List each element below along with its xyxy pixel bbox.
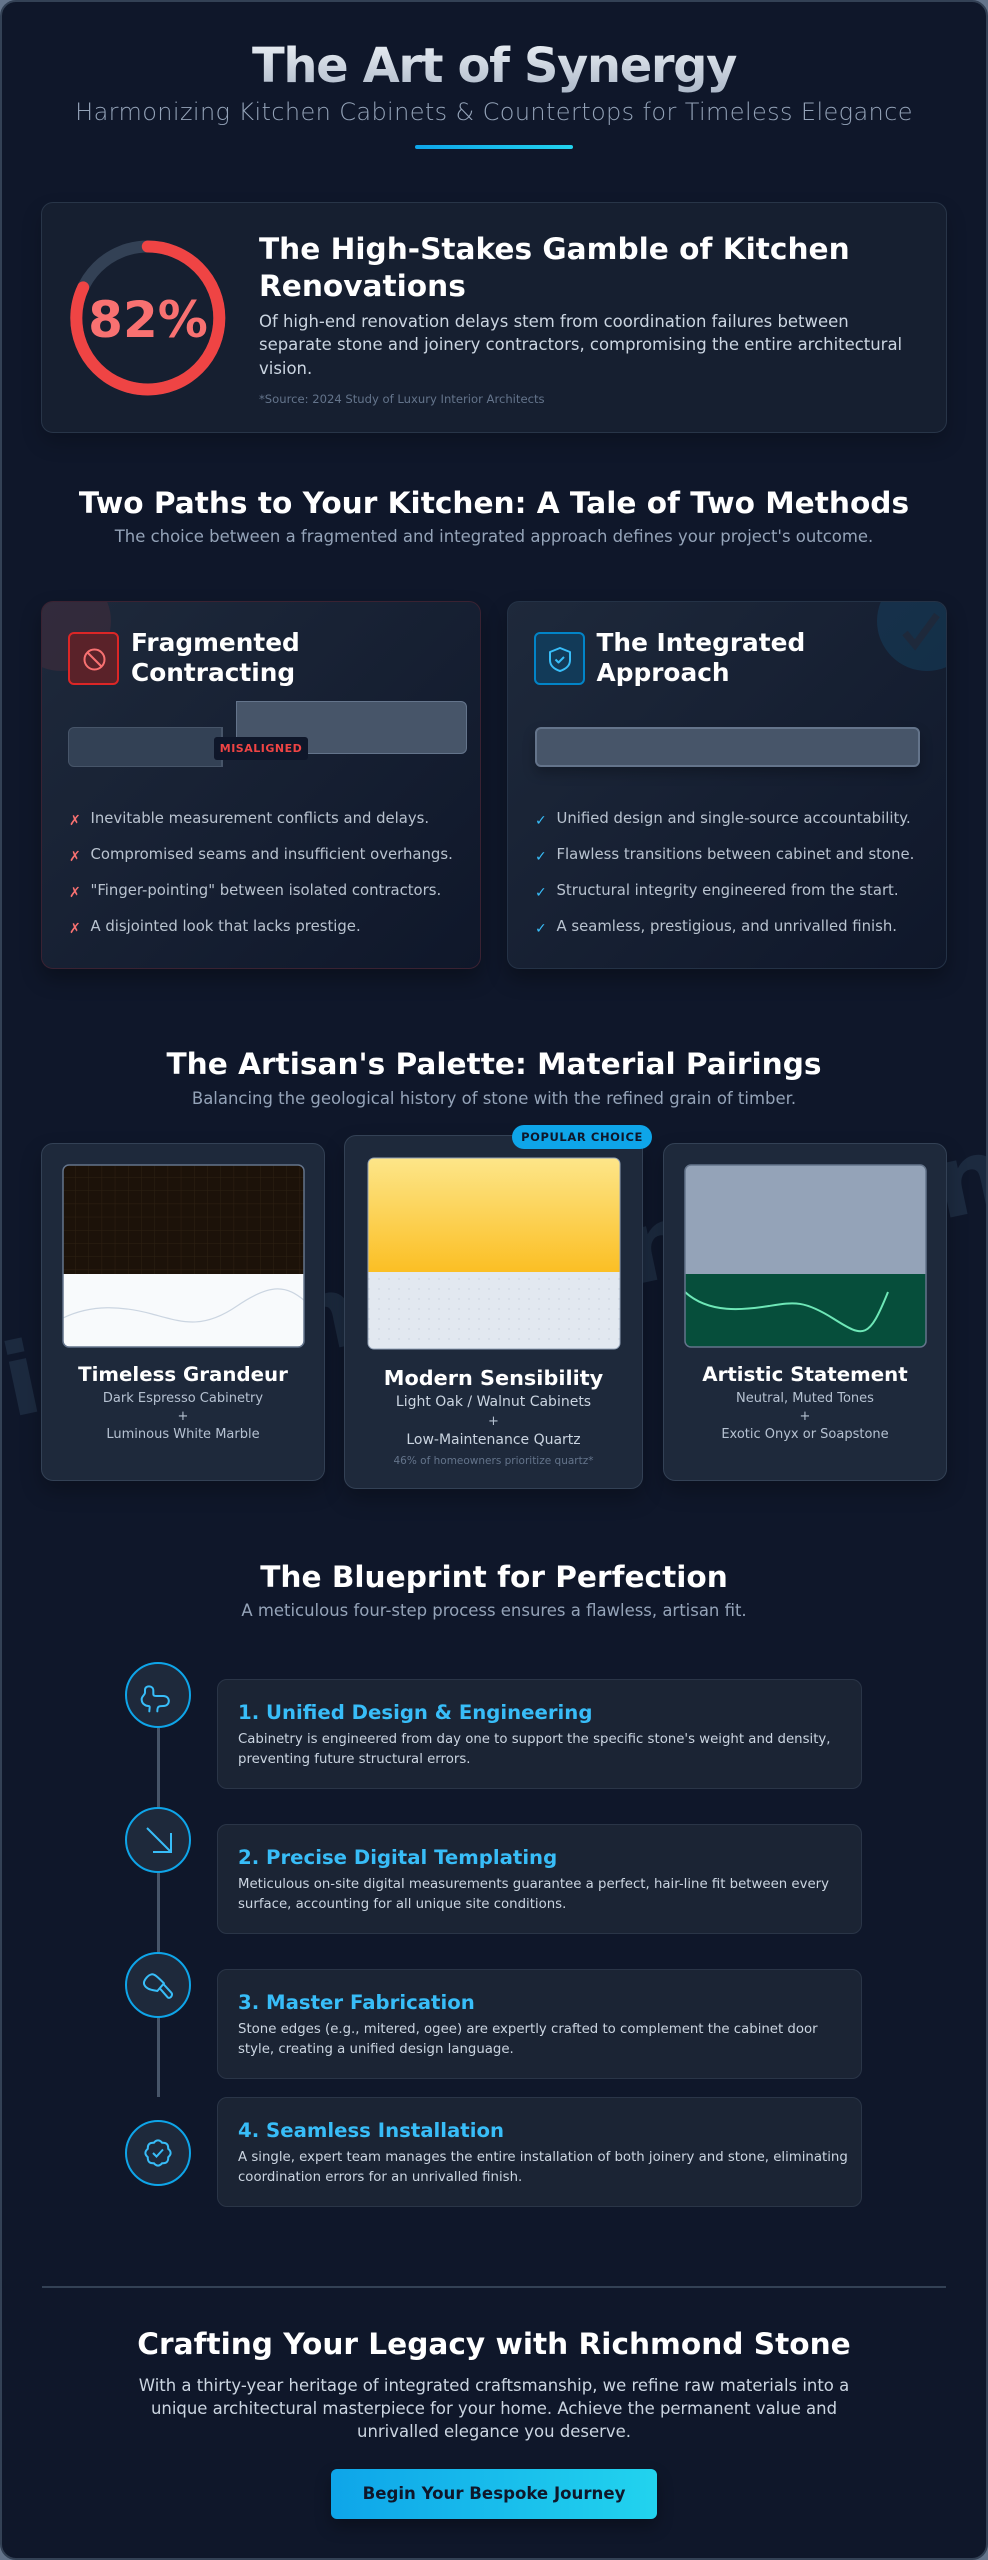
step 3 card <box>217 1969 862 2079</box>
card heading <box>131 628 300 687</box>
card: artistic statement: + <box>800 1409 810 1424</box>
stat number: 82% <box>88 290 208 348</box>
misaligned tag <box>214 737 308 760</box>
subheading: blueprint: A meticulous four-step process ensures a flawless, artisan fit. <box>241 1601 747 1620</box>
card text <box>702 1363 908 1442</box>
step 4 card <box>217 2097 862 2207</box>
list: benefits: ✓ <box>535 849 547 865</box>
closing text <box>139 2376 849 2441</box>
step 1 text: preventing future structural errors. <box>238 1752 470 1767</box>
panel text: separate stone and joinery contractors, compromising the entire architectural <box>259 335 902 354</box>
corner circle <box>11 571 111 671</box>
list: drawbacks: ✗ <box>69 921 81 937</box>
title: The Art of Synergy <box>252 38 736 94</box>
step 1 marker <box>125 1662 191 1728</box>
card: modern sensibility: Modern Sensibility <box>384 1366 603 1390</box>
swatch: neutral and onyx <box>684 1164 927 1348</box>
panel: statistic <box>41 202 947 433</box>
card: artistic statement: Artistic Statement <box>702 1363 908 1386</box>
card text <box>78 1363 288 1442</box>
step 2 title: 2. Precise Digital Templating <box>238 1846 557 1869</box>
step 3 text: style, creating a unified design language. <box>238 2042 514 2057</box>
panel heading: Renovations <box>259 269 466 303</box>
call to action button <box>331 2469 657 2519</box>
list: drawbacks: ✗ <box>69 885 81 901</box>
card heading <box>596 628 805 687</box>
timeline connector <box>156 1728 160 2097</box>
list: benefits: ✓ <box>535 885 547 901</box>
card heading: The Integrated <box>596 628 805 657</box>
call to action button: Begin Your Bespoke Journey <box>363 2484 625 2503</box>
list: benefits: ✓ <box>535 813 547 829</box>
list: benefits <box>535 809 914 937</box>
card: timeless grandeur: + <box>178 1409 188 1424</box>
panel heading <box>259 232 850 303</box>
step 2 text <box>238 1877 829 1912</box>
list: drawbacks: ✗ <box>69 849 81 865</box>
card: modern sensibility: Light Oak / Walnut Cabinets <box>396 1394 591 1410</box>
card: timeless grandeur: Timeless Grandeur <box>78 1363 288 1386</box>
subtitle: Harmonizing Kitchen Cabinets & Countertops for Timeless Elegance <box>75 98 913 126</box>
heading: blueprint: The Blueprint for Perfection <box>260 1560 728 1594</box>
corner circle with check <box>877 571 977 671</box>
accent line <box>415 145 573 149</box>
panel text: vision. <box>259 359 312 378</box>
closing heading: Crafting Your Legacy with Richmond Stone <box>137 2327 851 2361</box>
card heading: Approach <box>596 658 730 687</box>
heading: palette: The Artisan's Palette: Material Pairings <box>166 1047 822 1081</box>
list: drawbacks: Compromised seams and insufficient overhangs. <box>90 845 453 863</box>
list: benefits: A seamless, prestigious, and unrivalled finish. <box>556 917 897 935</box>
step 4 marker <box>125 2120 191 2186</box>
card: artistic statement <box>663 1143 947 1481</box>
title <box>0 36 988 96</box>
step 2 text: surface, accounting for all unique site conditions. <box>238 1897 566 1912</box>
step 4 text <box>238 2150 848 2185</box>
step 3 text <box>238 2022 818 2057</box>
subheading: palette: Balancing the geological history of stone with the refined grain of timber. <box>192 1089 796 1108</box>
badge: popular choice <box>512 1125 652 1149</box>
badge: popular choice: POPULAR CHOICE <box>521 1130 643 1144</box>
list: drawbacks: ✗ <box>69 813 81 829</box>
step 3 title: 3. Master Fabrication <box>238 1991 475 2014</box>
step 1 text <box>238 1732 831 1767</box>
list: benefits: ✓ <box>535 921 547 937</box>
step 2 marker <box>125 1807 191 1873</box>
card: artistic statement: Neutral, Muted Tones <box>736 1391 874 1406</box>
misaligned tag: MISALIGNED <box>220 742 302 755</box>
card: timeless grandeur: Luminous White Marble <box>106 1427 260 1442</box>
panel: integrated approach <box>507 601 947 969</box>
card: modern sensibility: Low-Maintenance Quartz <box>406 1432 581 1448</box>
swatch: oak and quartz <box>368 1158 620 1350</box>
closing text: unique architectural masterpiece for your home. Achieve the permanent value and <box>151 2399 837 2418</box>
step 2 card <box>217 1824 862 1934</box>
card: modern sensibility: + <box>488 1414 499 1429</box>
donut chart: 82% <box>70 240 226 396</box>
card: modern sensibility <box>344 1135 643 1489</box>
diagram: upper bar <box>236 701 467 754</box>
list: benefits: Unified design and single-source accountability. <box>556 809 911 827</box>
card heading: Fragmented <box>131 628 300 657</box>
list: benefits: Structural integrity engineered from the start. <box>556 881 899 899</box>
step 3 marker <box>125 1952 191 2018</box>
card: artistic statement: Exotic Onyx or Soapstone <box>721 1427 889 1442</box>
list: drawbacks: Inevitable measurement conflicts and delays. <box>90 809 429 827</box>
step 4 text: coordination errors for an unrivalled finish. <box>238 2170 522 2185</box>
card: timeless grandeur <box>41 1143 325 1481</box>
step 4 title: 4. Seamless Installation <box>238 2119 504 2142</box>
icon: shield check <box>534 632 585 685</box>
list: drawbacks: "Finger-pointing" between isolated contractors. <box>90 881 441 899</box>
panel: fragmented contracting <box>41 601 481 969</box>
step 1 text: Cabinetry is engineered from day one to support the specific stone's weight and density, <box>238 1732 831 1747</box>
step 1 card <box>217 1679 862 1789</box>
icon: prohibited <box>68 632 119 685</box>
list: drawbacks: A disjointed look that lacks prestige. <box>90 917 361 935</box>
step 3 text: Stone edges (e.g., mitered, ogee) are expertly crafted to complement the cabinet door <box>238 2022 818 2037</box>
list: benefits: Flawless transitions between cabinet and stone. <box>556 845 914 863</box>
diagram: lower bar <box>68 727 223 767</box>
card: modern sensibility: 46% of homeowners prioritize quartz* <box>393 1455 594 1467</box>
step 2 text: Meticulous on-site digital measurements guarantee a perfect, hair-line fit between every <box>238 1877 829 1892</box>
closing text: unrivalled elegance you deserve. <box>357 2422 631 2441</box>
step 4 text: A single, expert team manages the entire installation of both joinery and stone, eliminating <box>238 2150 848 2165</box>
subheading: two paths: The choice between a fragmented and integrated approach defines your project's outcome. <box>115 527 873 546</box>
closing text: With a thirty-year heritage of integrated craftsmanship, we refine raw materials into a <box>139 2376 849 2395</box>
heading: two paths: Two Paths to Your Kitchen: A Tale of Two Methods <box>79 486 909 520</box>
list: drawbacks <box>69 809 453 937</box>
card text <box>384 1366 603 1467</box>
panel text <box>259 312 902 378</box>
panel heading: The High-Stakes Gamble of Kitchen <box>259 232 850 266</box>
card heading: Contracting <box>131 658 295 687</box>
card: timeless grandeur: Dark Espresso Cabinetry <box>103 1391 263 1406</box>
panel text: Of high-end renovation delays stem from coordination failures between <box>259 312 849 331</box>
source note: *Source: 2024 Study of Luxury Interior Architects <box>259 392 545 406</box>
step 1 title: 1. Unified Design & Engineering <box>238 1701 592 1724</box>
diagram: unified bar <box>534 727 920 767</box>
swatch: espresso and marble <box>62 1164 305 1348</box>
